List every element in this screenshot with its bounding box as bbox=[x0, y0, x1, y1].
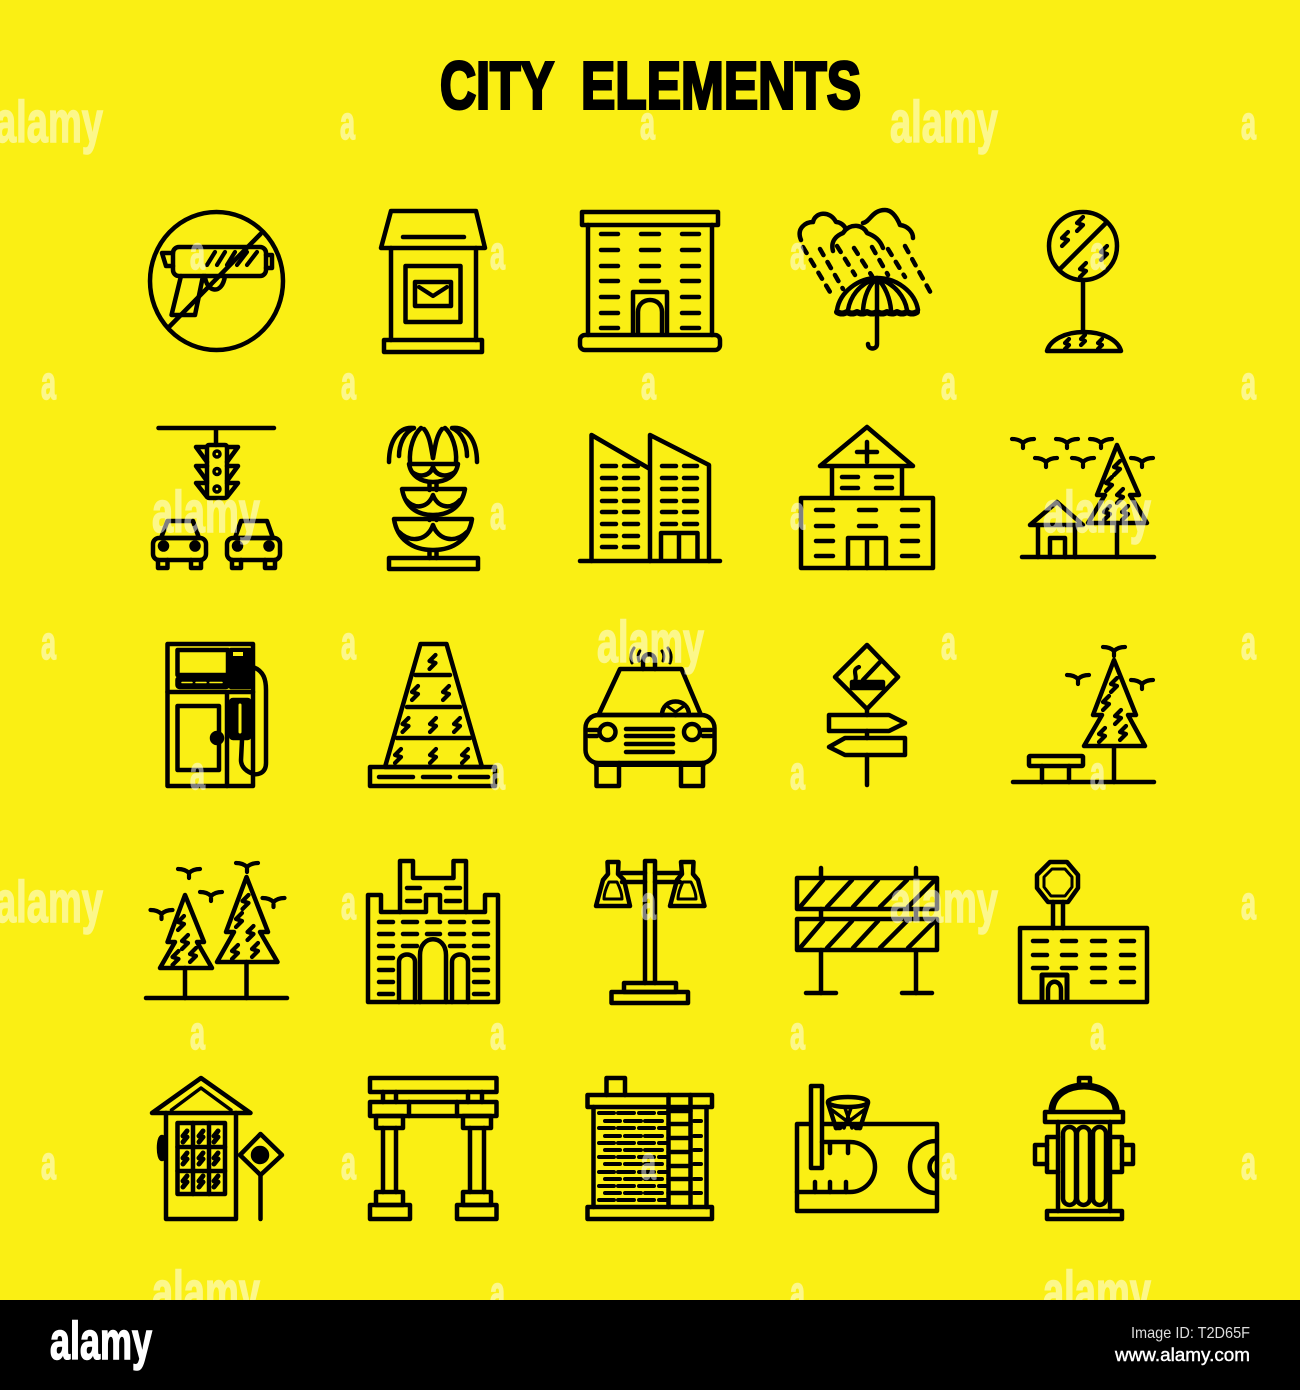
watermarks: a bbox=[790, 746, 805, 799]
icon: rain clouds and umbrella bbox=[800, 210, 933, 348]
watermarks: a bbox=[341, 356, 356, 409]
watermarks: a bbox=[790, 1266, 805, 1319]
watermarks: a bbox=[341, 876, 356, 929]
watermarks: a bbox=[1090, 1006, 1105, 1059]
watermarks: a bbox=[340, 96, 355, 149]
icon: phone booth with sign bbox=[152, 1078, 282, 1219]
watermarks: a bbox=[490, 226, 505, 279]
watermarks: a bbox=[941, 616, 956, 669]
watermarks: a bbox=[1241, 616, 1256, 669]
icon: basketball court bbox=[797, 1086, 937, 1211]
icon: fountain bbox=[389, 428, 478, 569]
watermarks: a bbox=[41, 616, 56, 669]
icon: police car bbox=[586, 648, 714, 786]
watermarks: alamy bbox=[890, 870, 998, 935]
icon: tree, bench and birds bbox=[1013, 647, 1154, 782]
icon: traffic light and cars bbox=[153, 428, 280, 568]
icon: mailbox bbox=[381, 211, 485, 352]
watermarks: a bbox=[490, 1006, 505, 1059]
title bbox=[440, 48, 861, 124]
watermarks: a bbox=[790, 1006, 805, 1059]
icon: two trees and birds bbox=[146, 863, 287, 998]
watermarks: a bbox=[1241, 1136, 1256, 1189]
watermarks: a bbox=[941, 1136, 956, 1189]
watermarks: a bbox=[1090, 226, 1105, 279]
icon: street lamp bbox=[596, 861, 704, 1003]
watermarks: a bbox=[190, 226, 205, 279]
icon: stone arch gate bbox=[370, 1078, 496, 1219]
title: ELEMENTS bbox=[581, 48, 861, 124]
watermarks: a bbox=[1090, 746, 1105, 799]
watermarks: alamy bbox=[1043, 1260, 1151, 1325]
watermarks: a bbox=[790, 226, 805, 279]
icon: fire hydrant bbox=[1035, 1078, 1133, 1219]
footer bar bbox=[0, 1300, 1300, 1390]
watermarks: a bbox=[341, 616, 356, 669]
icon: building with sign bbox=[1020, 862, 1147, 1002]
watermarks: a bbox=[640, 96, 655, 149]
watermarks: a bbox=[41, 356, 56, 409]
watermarks: a bbox=[190, 746, 205, 799]
watermarks: a bbox=[341, 1136, 356, 1189]
footer logo: alamy bbox=[50, 1312, 152, 1371]
watermarks: a bbox=[190, 1006, 205, 1059]
watermarks: a bbox=[490, 486, 505, 539]
watermarks: a bbox=[641, 876, 656, 929]
watermarks: a bbox=[1241, 96, 1256, 149]
website: www.alamy.com bbox=[1114, 1345, 1250, 1365]
image id: Image ID: T2D65F bbox=[1131, 1325, 1250, 1342]
icon: traffic cone bbox=[370, 644, 495, 786]
watermarks: a bbox=[941, 356, 956, 409]
icon: twin towers bbox=[580, 435, 720, 561]
watermarks: alamy bbox=[597, 610, 704, 675]
watermarks: a bbox=[641, 1136, 656, 1189]
icon: no-entry sign on mound bbox=[1047, 212, 1121, 351]
watermarks: alamy bbox=[890, 90, 998, 155]
watermarks: alamy bbox=[152, 480, 260, 545]
icon: house, tree and birds bbox=[1012, 439, 1154, 557]
title: CITY bbox=[440, 48, 554, 124]
watermarks: a bbox=[1241, 356, 1256, 409]
watermarks: a bbox=[1241, 876, 1256, 929]
watermarks: a bbox=[641, 356, 656, 409]
icon: hospital bbox=[801, 427, 933, 568]
watermarks: a bbox=[790, 486, 805, 539]
watermarks: alamy bbox=[152, 1260, 260, 1325]
icon: brick building bbox=[588, 1078, 712, 1219]
watermarks: a bbox=[41, 1136, 56, 1189]
icon: apartment building bbox=[580, 212, 720, 350]
icon: castle bbox=[368, 861, 498, 1002]
icon: gas pump bbox=[168, 644, 266, 786]
icon: no-smoking road sign with arrows bbox=[829, 645, 905, 785]
watermarks: a bbox=[490, 1266, 505, 1319]
watermarks: alamy bbox=[1043, 480, 1151, 545]
icon: no guns sign bbox=[150, 212, 283, 350]
watermarks: a bbox=[490, 746, 505, 799]
icon: road barrier bbox=[797, 868, 937, 993]
